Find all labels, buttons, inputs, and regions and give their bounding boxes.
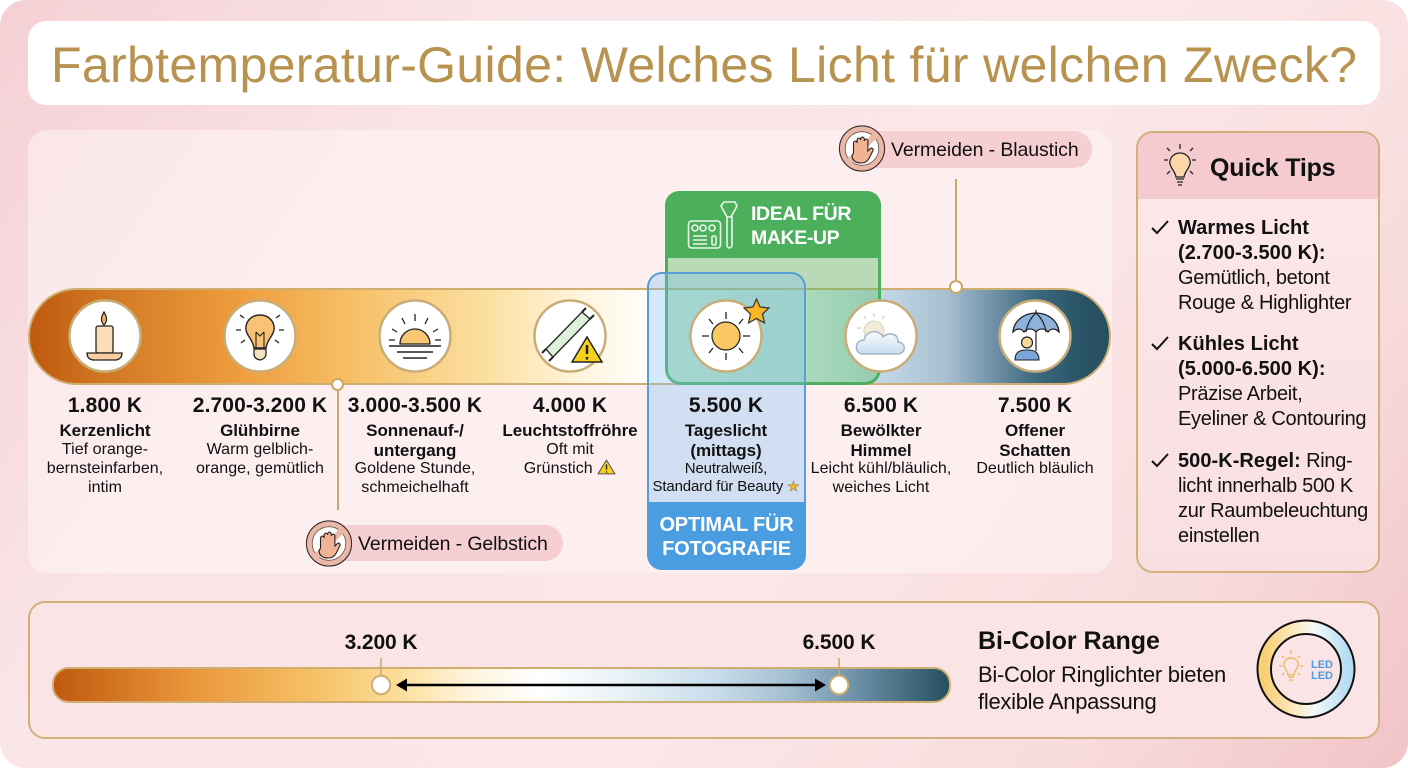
tip: cool light: Eyeliner & Contouring bbox=[1178, 408, 1366, 430]
highlight: optimal for photography bbox=[647, 272, 806, 570]
tip: warm light: Warmes Licht bbox=[1178, 217, 1309, 239]
column: 5.500 K: Standard für Beauty ★ bbox=[652, 478, 800, 494]
column: 3.000-3.500 K: Sonnenauf-/ bbox=[366, 421, 464, 440]
quick tips heading: Quick Tips bbox=[1210, 154, 1335, 182]
column: 6.500 K: weiches Licht bbox=[833, 479, 929, 496]
column: 3.000-3.500 K: schmeichelhaft bbox=[361, 479, 469, 496]
column: 4.000 K bbox=[502, 394, 638, 476]
icon: stop hand bbox=[838, 125, 886, 172]
column: 5.500 K: (mittags) bbox=[690, 440, 762, 460]
green translucent body bbox=[665, 251, 881, 385]
blue footer bbox=[647, 502, 806, 570]
icon: light bulb bbox=[223, 299, 297, 373]
icon: cloud bbox=[844, 299, 918, 373]
callout line: avoid blue cast bbox=[955, 179, 957, 287]
panel: colour temperature scale bbox=[28, 130, 1112, 573]
bi-color gradient bar bbox=[52, 667, 951, 703]
temperature gradient bar bbox=[28, 288, 1111, 385]
icon: check 1 bbox=[1151, 220, 1169, 234]
column: 1.800 K: Kerzenlicht bbox=[59, 421, 151, 440]
column: 5.500 K: Neutralweiß, bbox=[685, 460, 767, 477]
tip: 500-K rule: einstellen bbox=[1178, 525, 1260, 547]
marker dot: avoid yellow cast bbox=[331, 378, 344, 391]
icon: check 3 bbox=[1151, 453, 1169, 468]
column: 2.700-3.200 K: Warm gelblich- bbox=[207, 440, 313, 458]
column: 1.800 K: bernsteinfarben, bbox=[47, 460, 163, 476]
icon: candle bbox=[68, 299, 142, 373]
tip: 500-K rule: 500-K-Regel: Ring- bbox=[1178, 450, 1352, 472]
tip: cool light: Präzise Arbeit, bbox=[1178, 383, 1302, 405]
column: 6.500 K: 6.500 K bbox=[844, 394, 918, 417]
column: 7.500 K bbox=[976, 394, 1094, 477]
column: 2.700-3.200 K: 2.700-3.200 K bbox=[193, 394, 327, 417]
highlight: ideal for make-up bbox=[665, 191, 881, 385]
callout line: avoid yellow cast bbox=[337, 384, 339, 510]
tip: cool light bbox=[1178, 333, 1366, 430]
column: 6.500 K: Bewölkter bbox=[841, 421, 921, 440]
column: 4.000 K: Grünstich bbox=[524, 460, 593, 476]
label: 6.500 K: 6.500 K bbox=[803, 631, 875, 654]
title text: Farbtemperatur-Guide: Welches Licht für welchen Zweck? bbox=[51, 37, 1357, 93]
column: 2.700-3.200 K bbox=[193, 394, 327, 476]
tip: 500-K rule: licht innerhalb 500 K bbox=[1178, 475, 1353, 497]
column: 1.800 K bbox=[47, 394, 163, 496]
column: 7.500 K: Offener bbox=[1005, 421, 1065, 440]
icon: stop hand bbox=[306, 520, 352, 567]
make-up label: MAKE-UP bbox=[751, 227, 839, 249]
green header bbox=[665, 191, 881, 258]
marker dot: avoid blue cast bbox=[949, 280, 963, 294]
tip: warm light: Gemütlich, betont bbox=[1178, 267, 1330, 289]
tip: cool light: Kühles Licht bbox=[1178, 333, 1299, 355]
column: 5.500 K: 5.500 K bbox=[689, 394, 763, 417]
icon: make-up palette and brush bbox=[688, 201, 738, 249]
tip: warm light: (2.700-3.500 K): bbox=[1178, 242, 1326, 264]
quick tips header bbox=[1138, 133, 1378, 199]
callout: avoid blue cast bbox=[838, 125, 1092, 172]
double arrow bbox=[396, 678, 826, 692]
pill label: Vermeiden - Gelbstich bbox=[358, 533, 548, 555]
panel: quick tips bbox=[1136, 131, 1380, 573]
tip: cool light: (5.000-6.500 K): bbox=[1178, 358, 1326, 380]
blue translucent body bbox=[647, 272, 806, 507]
icon: sun with star bbox=[689, 298, 770, 373]
icon: LED ring light bbox=[1256, 620, 1356, 718]
label: 3.200 K: 3.200 K bbox=[345, 631, 417, 654]
pill label: Vermeiden - Blaustich bbox=[891, 139, 1079, 161]
make-up label: IDEAL FÜR bbox=[751, 203, 851, 225]
column: 6.500 K bbox=[811, 394, 951, 496]
callout: avoid yellow cast bbox=[306, 520, 563, 567]
icon: tips bulb bbox=[1164, 144, 1196, 186]
tip: 500-K rule: zur Raumbeleuchtung bbox=[1178, 500, 1368, 522]
title banner bbox=[28, 21, 1380, 105]
column: 7.500 K: Deutlich bläulich bbox=[976, 460, 1094, 477]
marker: 3.200 K bbox=[370, 658, 392, 696]
pill label bbox=[325, 525, 563, 561]
tip: warm light: Rouge & Highlighter bbox=[1178, 292, 1351, 314]
panel: bi-color range bbox=[28, 601, 1380, 739]
column: 2.700-3.200 K: orange, gemütlich bbox=[196, 460, 324, 476]
bi-color description: Bi-Color Ringlichter bieten bbox=[978, 662, 1226, 687]
icon: LED ring light: LED bbox=[1311, 670, 1333, 682]
column: 1.800 K: intim bbox=[88, 478, 122, 496]
column: 1.800 K: Tief orange- bbox=[62, 440, 148, 458]
bi-color description: flexible Anpassung bbox=[978, 688, 1156, 714]
column: 3.000-3.500 K: untergang bbox=[374, 440, 456, 460]
column: 4.000 K: 4.000 K bbox=[533, 394, 607, 417]
pill label bbox=[858, 131, 1092, 168]
icon: sunrise bbox=[378, 299, 452, 373]
column: 3.000-3.500 K bbox=[348, 394, 482, 496]
column: 4.000 K: Leuchtstoffröhre bbox=[502, 421, 638, 440]
blue footer: FOTOGRAFIE bbox=[662, 538, 791, 560]
marker: 6.500 K bbox=[828, 658, 850, 696]
icon: LED ring light: LED bbox=[1311, 659, 1333, 671]
column: 1.800 K: 1.800 K bbox=[68, 394, 142, 417]
column: 5.500 K: Tageslicht bbox=[685, 421, 767, 440]
blue footer: OPTIMAL FÜR bbox=[659, 514, 794, 536]
icon: check 2 bbox=[1151, 336, 1169, 350]
tip: 500-K rule bbox=[1178, 450, 1368, 547]
bi-color heading: Bi-Color Range bbox=[978, 627, 1160, 655]
bi-color description bbox=[978, 662, 1226, 714]
tip: warm light bbox=[1178, 217, 1352, 314]
column: 2.700-3.200 K: Glühbirne bbox=[220, 421, 300, 440]
column: 3.000-3.500 K: Goldene Stunde, bbox=[355, 460, 475, 477]
column: 6.500 K: Himmel bbox=[850, 440, 912, 460]
column: 3.000-3.500 K: 3.000-3.500 K bbox=[348, 394, 482, 417]
column: 4.000 K: Oft mit bbox=[546, 440, 594, 458]
column: 6.500 K: Leicht kühl/bläulich, bbox=[811, 460, 951, 477]
make-up label bbox=[751, 203, 851, 249]
icon: person under umbrella bbox=[998, 299, 1072, 373]
column: 7.500 K: 7.500 K bbox=[998, 394, 1072, 417]
column: 7.500 K: Schatten bbox=[999, 440, 1071, 460]
icon: fluorescent tube with warning bbox=[533, 299, 607, 373]
column: 5.500 K bbox=[652, 394, 800, 494]
